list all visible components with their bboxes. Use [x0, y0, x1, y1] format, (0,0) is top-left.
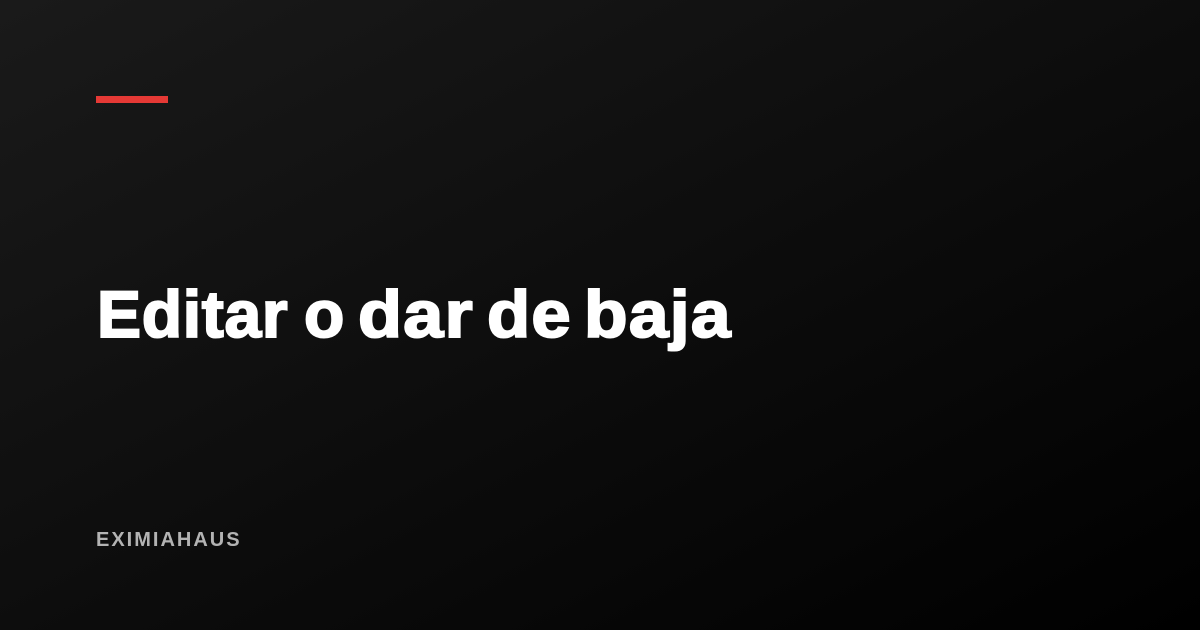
title: baja	[584, 277, 732, 351]
title	[97, 277, 732, 352]
title: de	[487, 277, 572, 351]
brand label: EXIMIAHAUS	[96, 529, 242, 551]
title: o	[304, 277, 346, 351]
title: dar	[358, 277, 474, 351]
red accent bar	[96, 96, 168, 103]
title: Editar	[97, 277, 288, 351]
